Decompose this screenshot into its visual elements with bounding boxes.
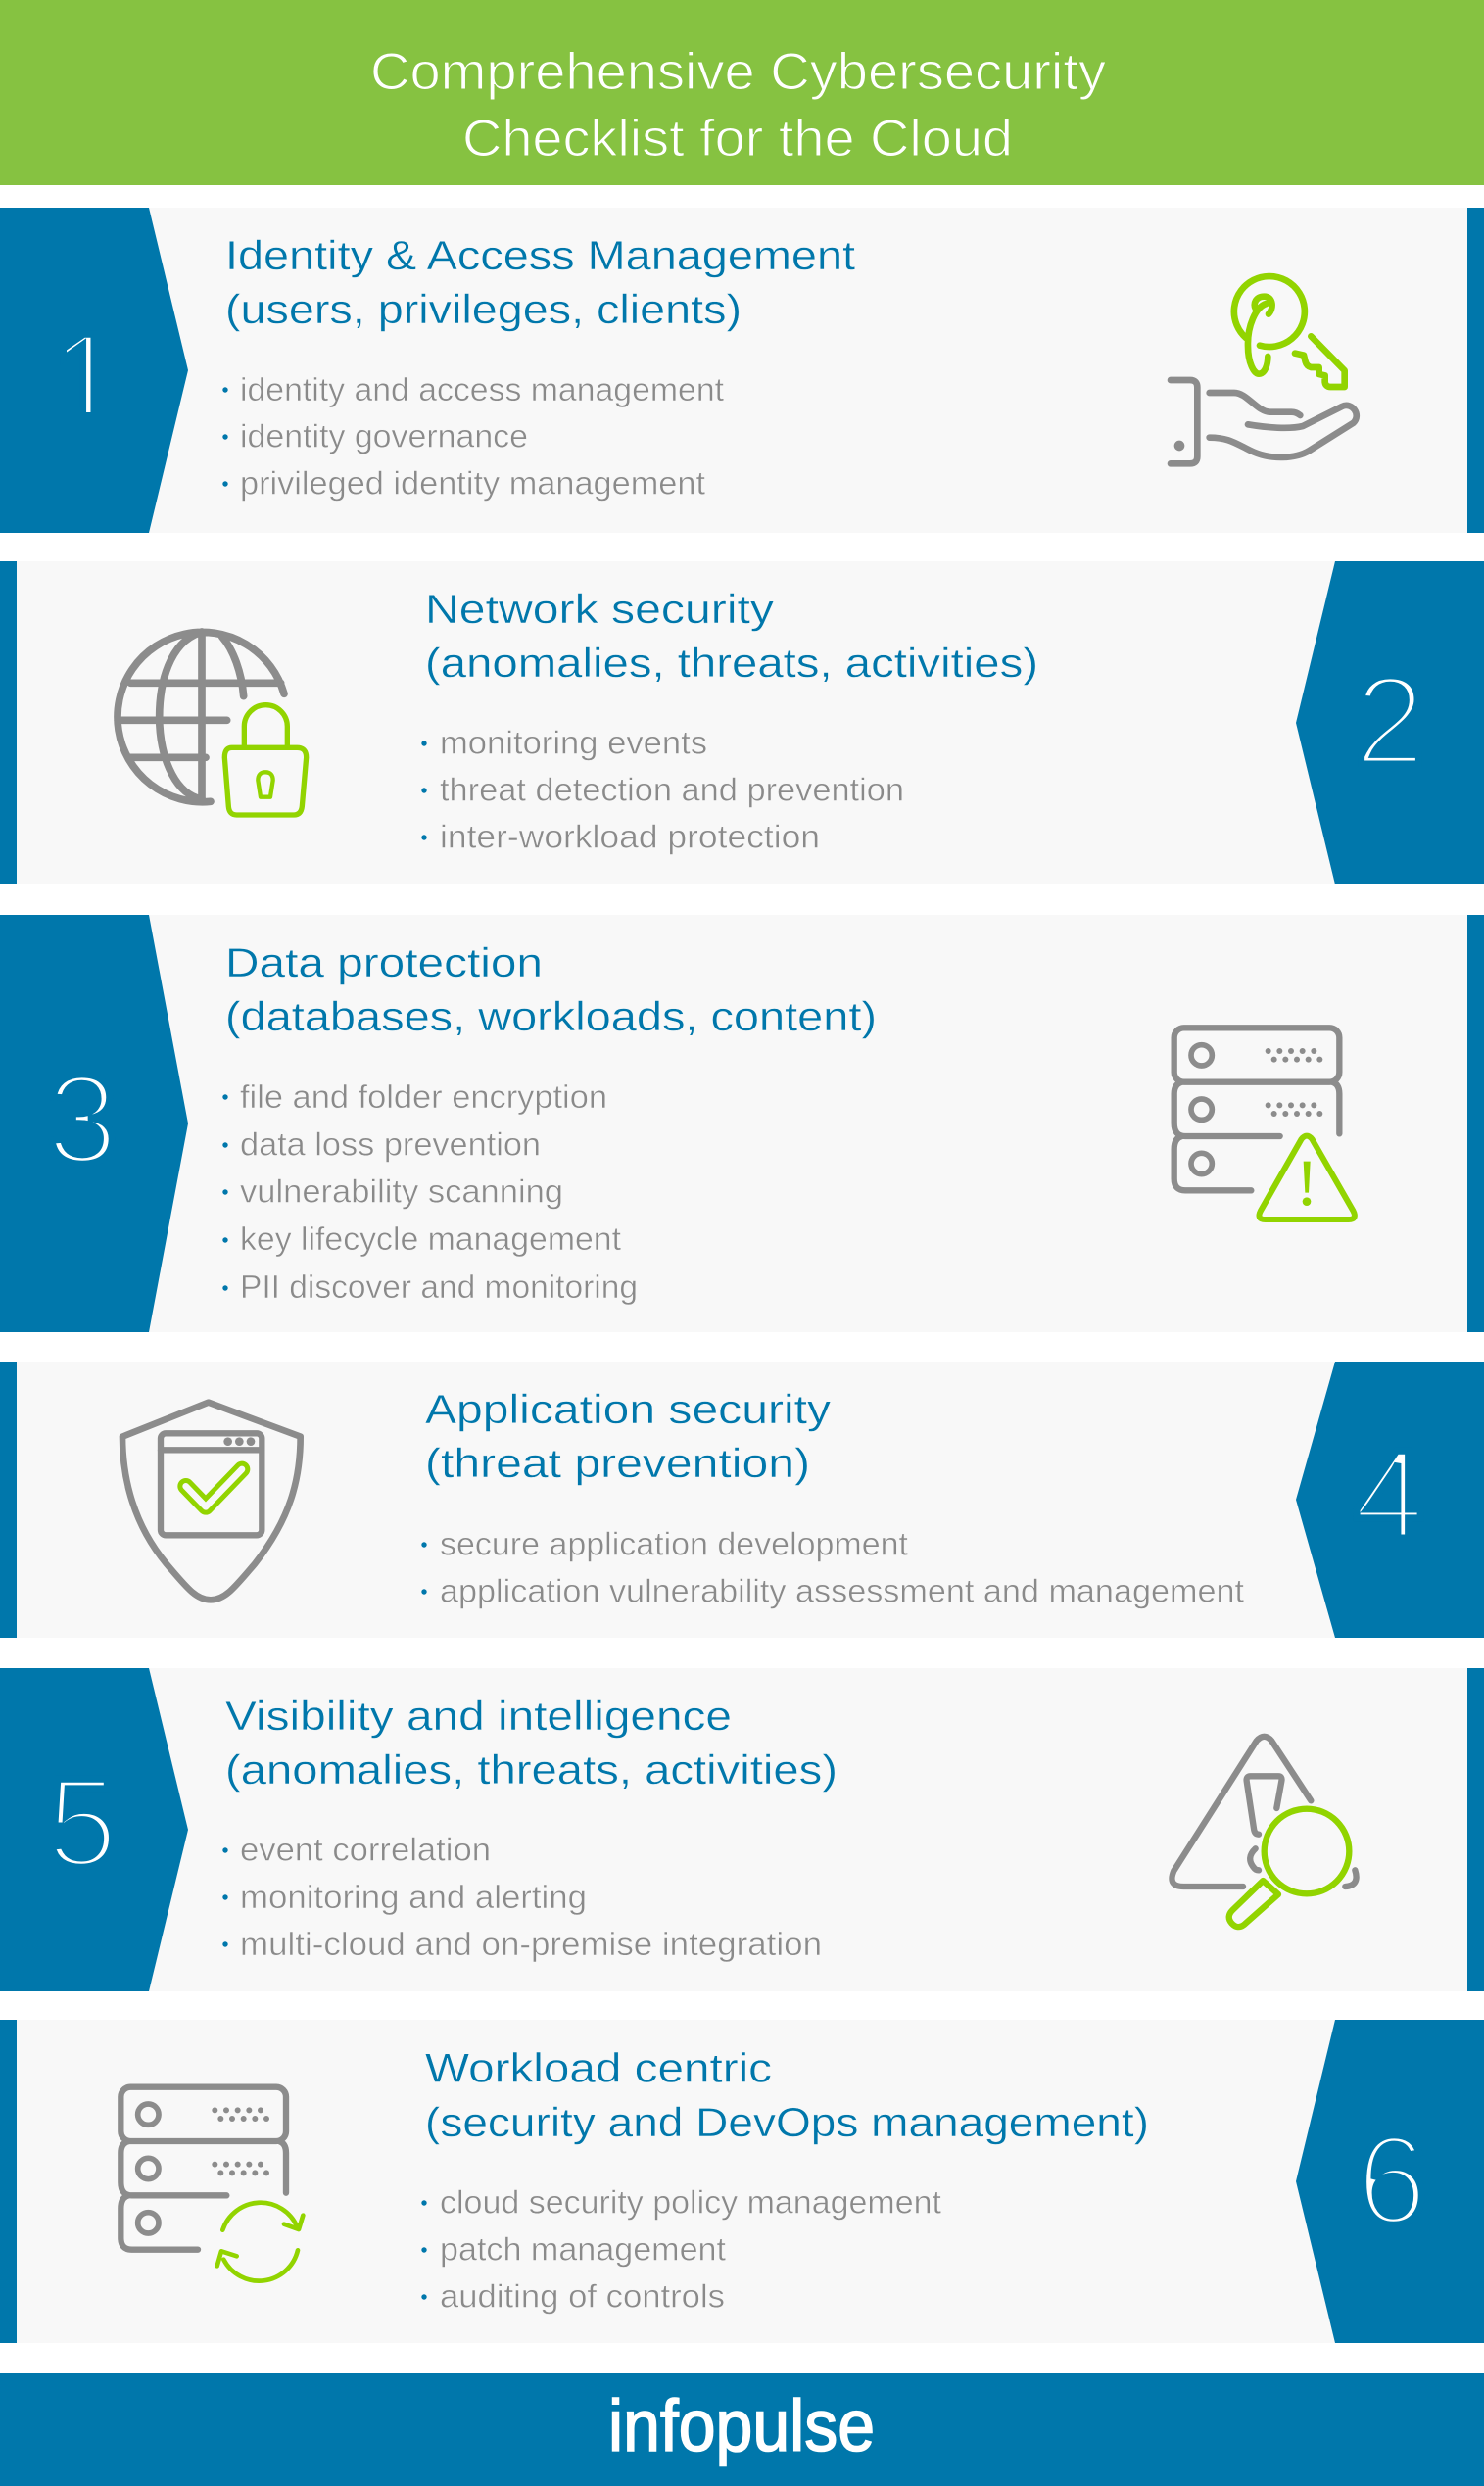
icon: globe with padlock — [118, 632, 307, 815]
list 3: data loss prevention — [240, 1126, 541, 1162]
list 5: event correlation — [240, 1832, 491, 1867]
heading 2: (anomalies, threats, activities) — [425, 640, 1038, 686]
number badge 1: 1 — [51, 308, 121, 449]
heading 3: Data protection — [225, 939, 543, 985]
heading 3: (databases, workloads, content) — [225, 993, 877, 1039]
icon: server with warning triangle — [1174, 1028, 1355, 1219]
list 3: file and folder encryption — [240, 1078, 607, 1115]
list 6: patch management — [440, 2231, 726, 2267]
header banner — [0, 0, 1484, 185]
list 4 — [421, 1526, 1244, 1608]
heading 1 — [225, 232, 855, 332]
list 2: monitoring events — [440, 725, 707, 760]
heading 5: Visibility and intelligence — [225, 1693, 732, 1739]
icon: shield with browser window and check mark — [122, 1403, 301, 1600]
number badge 6: 6 — [1357, 2110, 1427, 2251]
list 2: inter-workload protection — [440, 819, 820, 854]
icon: warning triangle with magnifying glass — [1172, 1737, 1357, 1927]
list 6: cloud security policy management — [440, 2184, 941, 2220]
number badge 5: 5 — [47, 1752, 118, 1893]
list 2 — [421, 725, 904, 854]
list 6: auditing of controls — [440, 2278, 725, 2314]
panel 3: data protection — [0, 915, 1484, 1332]
icon: key over open hand — [1171, 276, 1357, 463]
icon: server with refresh arrows — [120, 2087, 303, 2281]
heading 2 — [425, 586, 1038, 686]
heading 5 — [225, 1693, 838, 1793]
title — [370, 43, 1107, 167]
heading 6: Workload centric — [425, 2045, 772, 2090]
heading 2: Network security — [425, 586, 774, 632]
list 5: multi-cloud and on-premise integration — [240, 1926, 822, 1962]
number badge 3: 3 — [47, 1049, 118, 1190]
number badge 5 — [0, 1668, 188, 1991]
title: Comprehensive Cybersecurity — [370, 43, 1107, 101]
heading 5: (anomalies, threats, activities) — [225, 1746, 838, 1793]
heading 3 — [225, 939, 877, 1039]
number badge 4 — [1296, 1362, 1484, 1638]
list 1 — [222, 371, 724, 502]
heading 4 — [425, 1386, 831, 1486]
number badge 6 — [1296, 2020, 1484, 2343]
list 3 — [222, 1078, 638, 1305]
number badge 1 — [0, 208, 188, 533]
list 3: vulnerability scanning — [240, 1173, 563, 1209]
list 5: monitoring and alerting — [240, 1879, 587, 1915]
number badge 2 — [1296, 561, 1484, 884]
list 5 — [222, 1832, 822, 1962]
list 1: identity governance — [240, 417, 528, 454]
footer logo wordmark: infopulse — [608, 2385, 875, 2466]
heading 4: Application security — [425, 1386, 831, 1432]
list 4: secure application development — [440, 1526, 908, 1561]
list 3: PII discover and monitoring — [240, 1268, 638, 1305]
list 4: application vulnerability assessment and management — [440, 1573, 1244, 1608]
list 3: key lifecycle management — [240, 1220, 621, 1257]
panel 6: workload centric — [0, 2020, 1484, 2343]
list 1: identity and access management — [240, 371, 724, 407]
panel 1: identity and access management — [0, 208, 1484, 533]
heading 6: (security and DevOps management) — [425, 2099, 1149, 2145]
heading 6 — [425, 2045, 1149, 2145]
heading 1: (users, privileges, clients) — [225, 286, 742, 332]
list 1: privileged identity management — [240, 464, 705, 502]
list 6 — [421, 2184, 941, 2314]
panel 5: visibility and intelligence — [0, 1668, 1484, 1991]
number badge 3 — [0, 915, 188, 1332]
list 2: threat detection and prevention — [440, 772, 904, 807]
heading 1: Identity & Access Management — [225, 232, 855, 278]
panel 4: application security — [0, 1362, 1484, 1638]
footer bar — [0, 2373, 1484, 2486]
title: Checklist for the Cloud — [462, 110, 1013, 167]
number badge 2: 2 — [1355, 650, 1425, 791]
number badge 4: 4 — [1354, 1424, 1424, 1565]
panel 2: network security — [0, 561, 1484, 884]
heading 4: (threat prevention) — [425, 1440, 810, 1486]
